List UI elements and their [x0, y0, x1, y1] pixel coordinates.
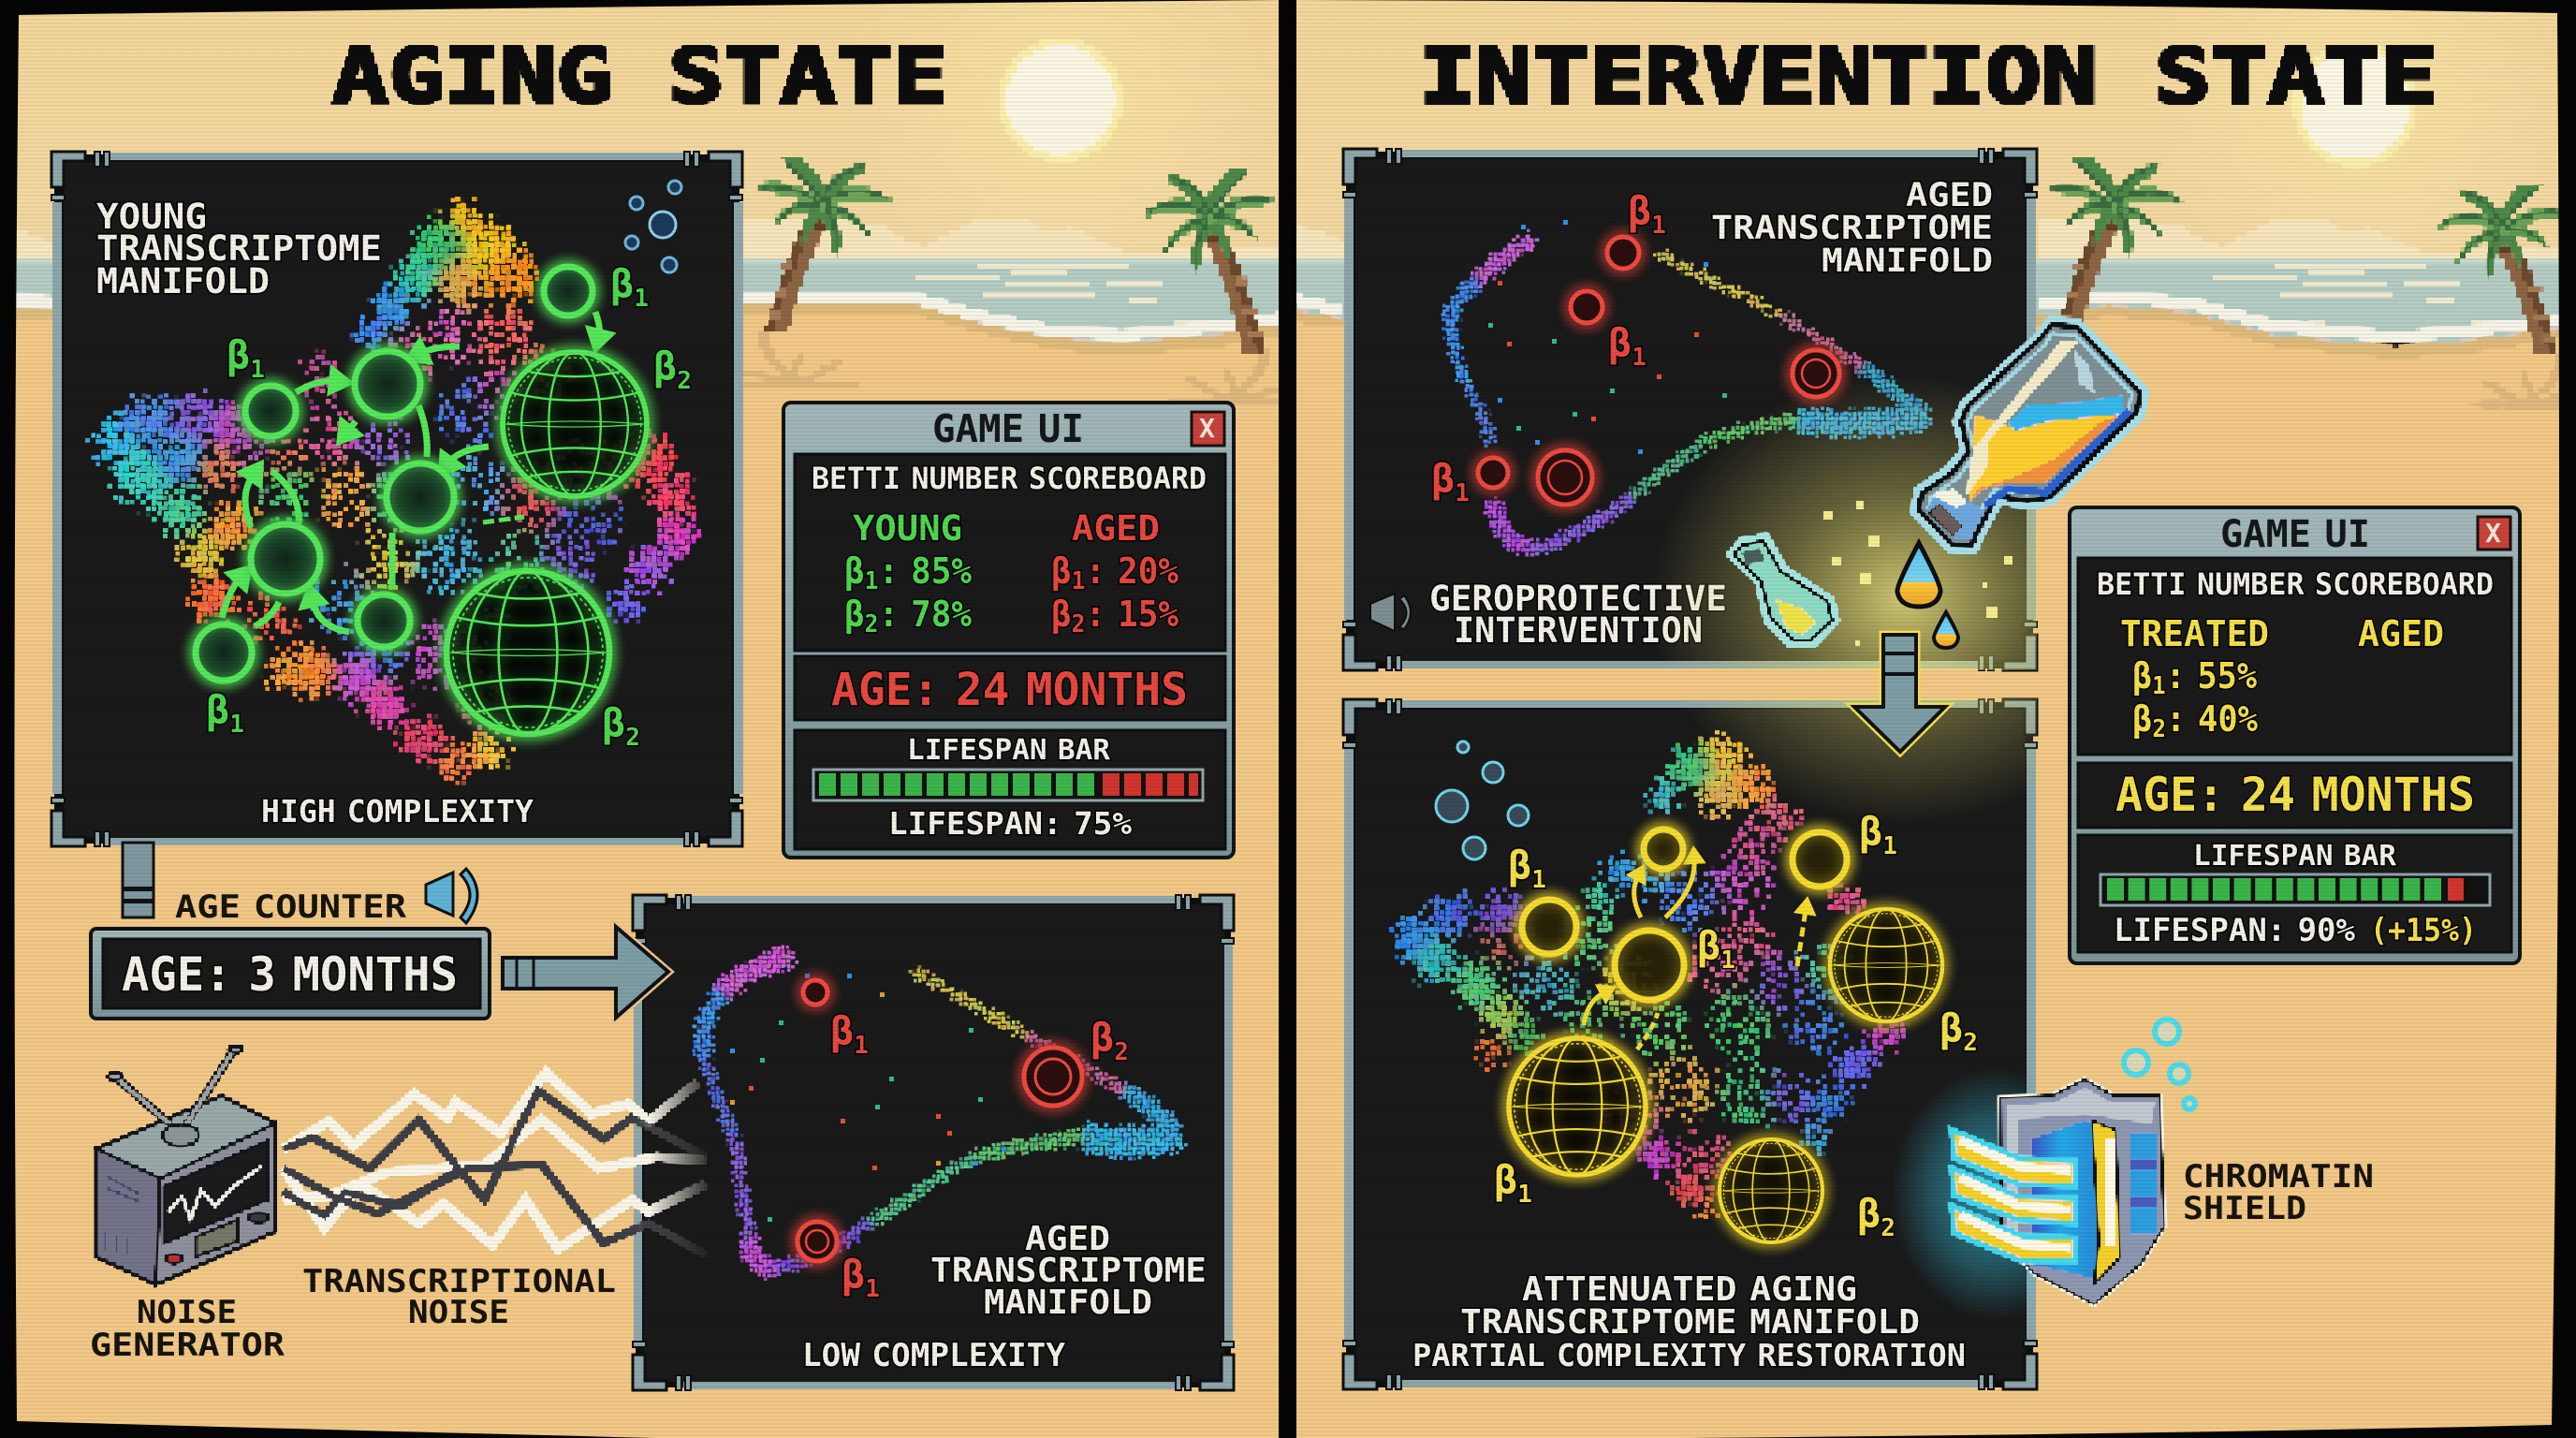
betti scoreboard: : 78% — [878, 594, 972, 635]
noise generator label: GENERATOR — [90, 1327, 285, 1364]
beta labels: 1 — [1517, 1181, 1532, 1209]
manifold label: MANIFOLD — [984, 1284, 1152, 1322]
beta labels: 1 — [229, 711, 244, 739]
beta labels: β — [830, 1008, 854, 1054]
betti scoreboard — [795, 454, 1225, 651]
betti scoreboard: 1 — [2152, 672, 2166, 700]
beta labels: β — [1494, 1157, 1517, 1203]
sparse scatter points — [1488, 220, 1727, 459]
geroprotective intervention label — [1429, 579, 1727, 651]
betti scoreboard: AGED — [2358, 613, 2444, 654]
lifespan bar: (+15%) — [2370, 912, 2477, 949]
close button — [1192, 412, 1224, 446]
betti scoreboard: β — [844, 594, 866, 635]
beta labels: 1 — [1632, 344, 1647, 372]
noise generator label — [90, 1294, 285, 1364]
beta labels: β — [1508, 843, 1531, 888]
transcriptional noise waves — [284, 1073, 706, 1255]
close button — [2478, 517, 2510, 550]
attenuated manifold caption: ATTENUATED AGING — [1522, 1270, 1857, 1309]
manifold label: TRANSCRIPTOME — [96, 228, 382, 269]
arrow: age to aged manifold — [503, 927, 668, 1018]
restoration arrows — [1584, 859, 1806, 1049]
age readout — [795, 656, 1225, 720]
betti scoreboard: 1 — [1072, 567, 1085, 595]
noise generator label: NOISE — [137, 1294, 237, 1331]
connector pipe to age counter — [123, 843, 154, 917]
beta labels: β — [653, 344, 677, 389]
manifold label — [1711, 177, 1993, 280]
beta labels: β — [1857, 1191, 1881, 1237]
game ui: treated scoreboard — [2070, 507, 2520, 963]
aging state beach background — [0, 0, 1289, 1438]
panel: aged manifold low complexity — [633, 895, 1234, 1390]
manifold label: YOUNG — [96, 197, 207, 237]
panel: attenuated aging manifold — [1343, 699, 2037, 1389]
beta labels: β — [1090, 1015, 1114, 1061]
beta labels: β — [602, 700, 625, 746]
lifespan bar: LIFESPAN: 90% — [2114, 912, 2356, 949]
age counter box — [91, 929, 490, 1019]
intervention state beach background — [1260, 0, 2576, 1438]
age counter box: AGE: 3 MONTHS — [122, 947, 458, 1002]
transcriptional noise label: NOISE — [408, 1294, 509, 1331]
manifold label: MANIFOLD — [96, 261, 270, 301]
game ui header: GAME UI — [932, 406, 1084, 451]
beta labels: β — [1859, 809, 1882, 855]
high complexity label: HIGH COMPLEXITY — [261, 793, 534, 829]
beta labels: β — [1608, 320, 1632, 366]
icon: noise generator tv — [96, 1046, 275, 1284]
lifespan bar: LIFESPAN: 75% — [888, 805, 1132, 842]
beta labels — [830, 1008, 1129, 1303]
beta labels: β — [1431, 456, 1455, 502]
low complexity label: LOW COMPLEXITY — [802, 1337, 1066, 1374]
betti scoreboard: : 20% — [1085, 550, 1178, 592]
betti scoreboard: β — [2132, 655, 2154, 697]
icon: muted speaker — [1370, 594, 1411, 631]
betti scoreboard — [2078, 558, 2511, 755]
red rings — [798, 980, 1082, 1261]
beta labels: β — [1697, 923, 1720, 969]
betti scoreboard: YOUNG — [853, 508, 962, 549]
betti scoreboard: AGED — [1072, 508, 1160, 549]
beta labels: β — [610, 261, 634, 307]
geroprotective intervention label: INTERVENTION — [1454, 610, 1703, 651]
beta labels: 1 — [1720, 946, 1735, 975]
betti scoreboard: 2 — [865, 610, 878, 638]
betti scoreboard: TREATED — [2120, 613, 2269, 654]
panel: aged transcriptome with intervention — [1343, 149, 2037, 670]
aged scatter ring — [1451, 239, 1928, 549]
manifold label: TRANSCRIPTOME — [930, 1252, 1207, 1290]
beta labels: 1 — [250, 356, 265, 384]
icon: potion drops — [1897, 543, 1958, 648]
betti scoreboard: β — [2132, 698, 2154, 740]
geroprotective intervention label: GEROPROTECTIVE — [1429, 579, 1727, 619]
arrow: intervention to attenuated manifold — [1854, 635, 1945, 752]
betti scoreboard: β — [1051, 594, 1073, 635]
attenuated manifold caption: TRANSCRIPTOME MANIFOLD — [1460, 1303, 1920, 1342]
manifold label — [930, 1220, 1207, 1322]
chromatin shield label — [2183, 1158, 2374, 1227]
intervention glow — [1664, 389, 2037, 811]
shield bubbles — [2124, 1020, 2195, 1109]
icon: potion bottle pouring — [1912, 318, 2146, 552]
chromatin shield label: SHIELD — [2183, 1190, 2306, 1227]
age counter label: AGE COUNTER — [175, 888, 407, 926]
red rings — [1478, 237, 1839, 505]
betti scoreboard: β — [844, 550, 866, 592]
manifold label — [96, 197, 382, 301]
sparse scatter points — [730, 974, 1006, 1222]
beta labels: 2 — [625, 724, 640, 752]
betti scoreboard: BETTI NUMBER SCOREBOARD — [2097, 566, 2494, 602]
icon: small vial — [1729, 536, 1837, 646]
attenuated manifold caption: PARTIAL COMPLEXITY RESTORATION — [1412, 1337, 1966, 1373]
lifespan bar: LIFESPAN BAR — [907, 734, 1111, 767]
beta labels: 1 — [1455, 479, 1470, 507]
rainbow partially restored manifold scatter — [1391, 736, 1904, 1220]
beta labels: 2 — [677, 367, 692, 395]
beta labels: β — [1628, 188, 1651, 234]
rainbow young manifold scatter — [94, 204, 695, 777]
close button: X — [1199, 413, 1215, 444]
beta labels: 1 — [854, 1032, 869, 1060]
betti scoreboard: : 15% — [1085, 594, 1178, 635]
betti scoreboard: 2 — [1072, 610, 1085, 638]
beta labels: 2 — [1881, 1214, 1895, 1242]
beta labels — [206, 261, 692, 752]
yellow beta rings and spheres — [1509, 829, 1942, 1242]
panel: young transcriptome manifold — [51, 152, 743, 846]
beta labels — [1431, 188, 1666, 507]
manifold label: TRANSCRIPTOME — [1711, 210, 1993, 247]
beta labels: 2 — [1114, 1038, 1129, 1066]
transcriptional noise label — [302, 1263, 616, 1331]
beta labels: β — [1939, 1005, 1963, 1051]
beta labels: 1 — [1882, 832, 1897, 860]
icon: speaker — [426, 869, 477, 923]
age readout: AGE: 24 MONTHS — [2115, 768, 2475, 822]
manifold label: MANIFOLD — [1822, 242, 1993, 280]
betti scoreboard: BETTI NUMBER SCOREBOARD — [812, 461, 1207, 496]
manifold label: AGED — [1906, 177, 1993, 214]
green beta-1 rings and beta-2 spheres — [196, 267, 647, 734]
lifespan bar — [795, 730, 1225, 849]
beta labels: 1 — [865, 1275, 880, 1303]
game ui: young vs aged scoreboard — [783, 403, 1234, 858]
beta labels — [1494, 809, 1978, 1242]
betti scoreboard: β — [1051, 550, 1073, 592]
bubbles — [625, 181, 681, 272]
age readout: AGE: 24 MONTHS — [831, 664, 1188, 716]
title: intervention state: INTERVENTION STATE — [1419, 33, 2437, 122]
beta labels: β — [227, 332, 250, 378]
transcriptional noise label: TRANSCRIPTIONAL — [302, 1263, 616, 1300]
beta labels: 1 — [634, 285, 649, 313]
beta labels: 1 — [1531, 866, 1546, 894]
close button: X — [2485, 518, 2501, 549]
aged scatter ring — [703, 955, 1178, 1269]
betti scoreboard: : 85% — [878, 550, 972, 592]
chromatin shield label: CHROMATIN — [2183, 1158, 2374, 1196]
icon: chromatin shield — [1891, 1020, 2195, 1320]
homology arrows — [222, 312, 599, 632]
lifespan bar — [2078, 835, 2511, 952]
sparkles — [1823, 501, 2012, 646]
beta labels: 1 — [1651, 212, 1666, 240]
betti scoreboard: 2 — [2152, 715, 2166, 743]
title: aging state: AGING STATE — [332, 33, 948, 121]
beta labels: β — [842, 1252, 865, 1298]
bubbles — [1436, 741, 1529, 859]
lifespan bar: LIFESPAN BAR — [2193, 840, 2397, 873]
attenuated manifold caption — [1412, 1270, 1966, 1373]
beta labels: 2 — [1963, 1029, 1978, 1057]
beta labels: β — [206, 687, 229, 733]
game ui header: GAME UI — [2220, 513, 2370, 556]
betti scoreboard: : 55% — [2166, 655, 2257, 697]
shield glow — [1896, 1075, 2037, 1313]
manifold label: AGED — [1025, 1220, 1110, 1258]
betti scoreboard: 1 — [865, 567, 878, 595]
betti scoreboard: : 40% — [2166, 698, 2258, 740]
